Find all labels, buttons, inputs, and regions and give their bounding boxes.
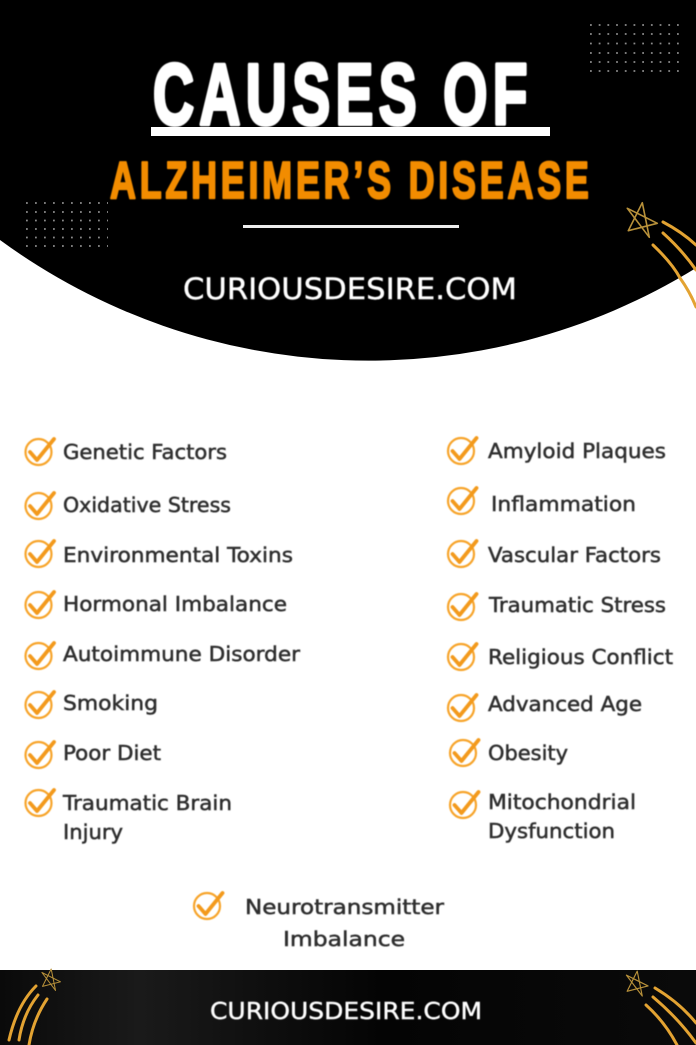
item: mitochondrial dysfunction: Mitochondrial bbox=[488, 790, 636, 814]
item: advanced age bbox=[448, 692, 642, 721]
item: inflammation: Inflammation bbox=[491, 492, 636, 516]
item: amyloid plaques: Amyloid Plaques bbox=[488, 439, 666, 463]
item: autoimmune disorder: Autoimmune Disorder bbox=[63, 642, 301, 666]
icon: shooting star header bbox=[627, 203, 696, 307]
item: smoking bbox=[26, 691, 158, 718]
dot grid: left bbox=[26, 203, 108, 246]
footer panel bbox=[0, 969, 696, 1045]
item: traumatic stress: Traumatic Stress bbox=[488, 593, 666, 617]
item: environmental toxins: Environmental Toxins bbox=[63, 543, 293, 567]
item: genetic factors: Genetic Factors bbox=[63, 440, 227, 464]
item: traumatic brain injury bbox=[26, 790, 232, 844]
item: inflammation bbox=[448, 488, 636, 516]
title underline bbox=[151, 127, 550, 136]
header panel bbox=[0, 0, 696, 361]
left checklist bbox=[26, 439, 301, 844]
item: neurotransmitter imbalance: Neurotransmitter bbox=[245, 895, 445, 919]
item: traumatic brain injury: Traumatic Brain bbox=[62, 791, 232, 815]
item: traumatic stress bbox=[448, 593, 666, 620]
item: oxidative stress: Oxidative Stress bbox=[63, 493, 231, 517]
subtitle: alzheimer's disease: ALZHEIMER’S DISEASE bbox=[110, 153, 593, 210]
item: neurotransmitter imbalance bbox=[194, 893, 445, 951]
item: mitochondrial dysfunction: Dysfunction bbox=[488, 819, 615, 843]
dot grid: top right bbox=[590, 25, 679, 71]
right checklist bbox=[448, 438, 673, 843]
item: smoking: Smoking bbox=[63, 691, 158, 715]
divider line bbox=[243, 225, 459, 228]
item: obesity bbox=[450, 740, 568, 766]
website label: footer: CURIOUSDESIRE.COM bbox=[210, 999, 482, 1025]
item: obesity: Obesity bbox=[488, 741, 568, 765]
title: causes of: CAUSES OF bbox=[153, 47, 533, 143]
item: poor diet bbox=[26, 741, 161, 768]
item: mitochondrial dysfunction bbox=[450, 790, 636, 843]
website label: header: CURIOUSDESIRE.COM bbox=[183, 272, 517, 306]
item: vascular factors: Vascular Factors bbox=[488, 543, 661, 567]
item: hormonal imbalance: Hormonal Imbalance bbox=[63, 592, 287, 616]
item: advanced age: Advanced Age bbox=[488, 692, 642, 716]
icon: shooting star footer right bbox=[626, 971, 696, 1045]
item: neurotransmitter imbalance: Imbalance bbox=[283, 927, 405, 951]
item: religious conflict: Religious Conflict bbox=[488, 645, 673, 669]
item: traumatic brain injury: Injury bbox=[63, 820, 123, 844]
item: poor diet: Poor Diet bbox=[63, 741, 161, 765]
icon: shooting star footer left bbox=[9, 969, 60, 1045]
